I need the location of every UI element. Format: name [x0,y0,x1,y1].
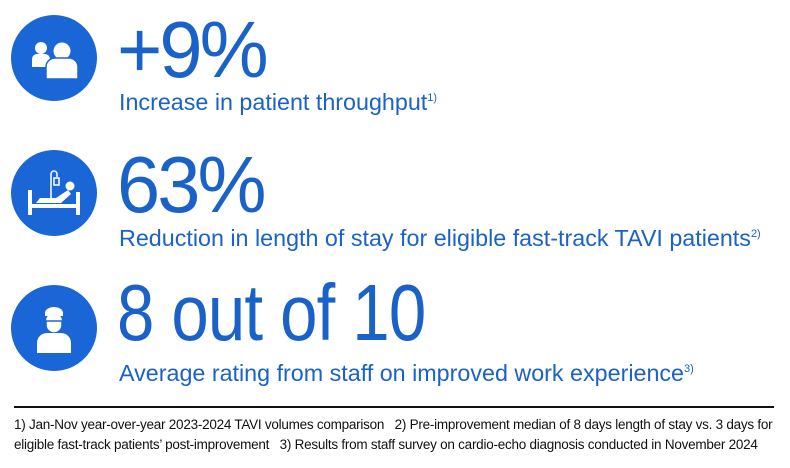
stat 1 number: +9% [117,5,266,94]
stat 1 caption: Increase in patient throughput1) [119,89,437,115]
icon: hospital bed [11,150,97,236]
footnotes [14,417,772,452]
footnotes: eligible fast-track patients’ post-improvement 3) Results from staff survey on cardio-echo diagnosis conducted in November 2024 [14,437,758,452]
stat 3 number: 8 out of 10 [117,268,425,357]
icon: people [11,15,97,101]
stat 3 caption: Average rating from staff on improved work experience3) [119,360,694,386]
footnotes: 1) Jan-Nov year-over-year 2023-2024 TAVI volumes comparison 2) Pre-improvement median of 8 days length of stay vs. 3 days for [14,417,772,432]
stat 2 caption: Reduction in length of stay for eligible fast-track TAVI patients2) [119,225,761,251]
icon: surgeon [11,285,97,371]
stat 2 number: 63% [117,140,264,229]
